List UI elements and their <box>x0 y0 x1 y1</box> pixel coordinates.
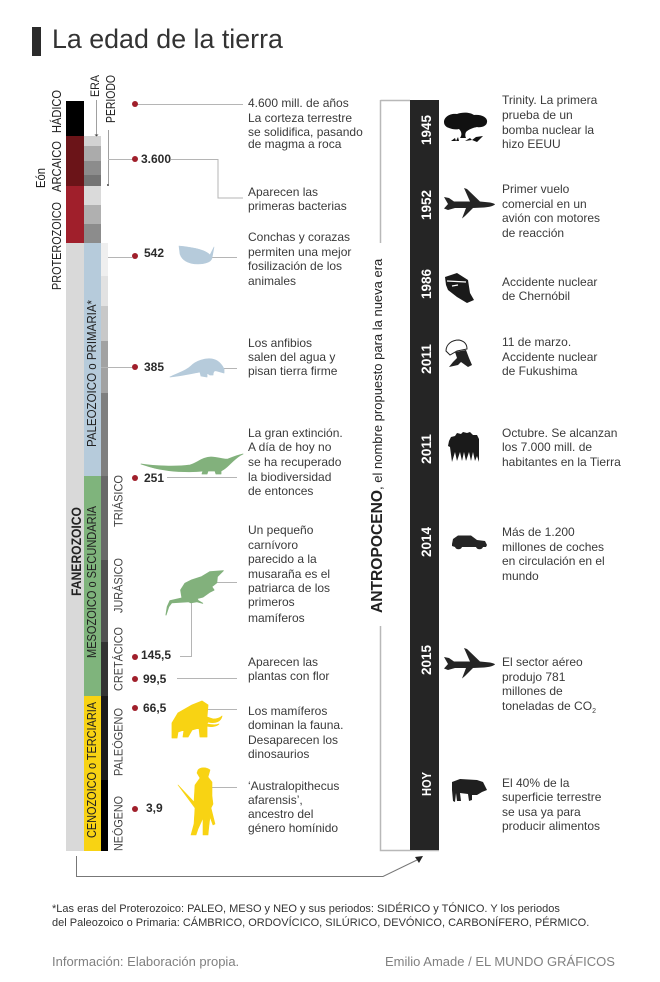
text blocks: geological events: afarensis’, <box>248 793 303 807</box>
source credit: Información: Elaboración propia. <box>52 954 239 969</box>
text blocks: geological events: Los mamíferos <box>248 704 327 718</box>
age markers: 3.600 <box>141 152 171 166</box>
age markers: 3,9 <box>146 801 163 815</box>
text blocks: geological events: pisan tierra firme <box>248 364 338 378</box>
timeline bar: Anthropocene years: 2014 <box>418 527 434 557</box>
period names: JURÁSICO <box>110 558 126 613</box>
timeline bar: Anthropocene years: HOY <box>419 772 434 796</box>
timeline bar: Anthropocene years: 2011 <box>418 344 434 374</box>
text blocks: human events: Trinity. La primera <box>502 93 598 107</box>
text blocks: geological events: patriarca de los <box>248 581 330 595</box>
timeline bar: Anthropocene years: 1952 <box>418 190 434 220</box>
text blocks: human events: Accidente nuclear <box>502 350 597 364</box>
text blocks: human events: Primer vuelo <box>502 182 570 196</box>
text blocks: human events <box>502 93 621 833</box>
timeline bar: Anthropocene years: 1986 <box>418 269 434 299</box>
age markers: 542 <box>144 246 164 260</box>
text blocks: human events: El sector aéreo <box>502 655 583 669</box>
period names: CRETÁCICO <box>110 627 126 691</box>
text blocks: geological events: 4.600 mill. de años <box>248 96 349 110</box>
text blocks: human events: 2 <box>592 708 596 715</box>
era and period pointers <box>94 100 109 186</box>
timeline bar: Anthropocene years: 2015 <box>418 645 434 675</box>
text blocks: geological events: Aparecen las <box>248 655 318 669</box>
text blocks: human events: se usa ya para <box>502 805 581 819</box>
vertical labels: eons and eras: HÁDICO <box>49 90 64 133</box>
column: periods <box>101 243 108 851</box>
icon: airplane 1952 <box>444 188 495 218</box>
text blocks: human events: hizo EEUU <box>502 137 561 151</box>
text blocks: geological events: se ha recuperado <box>248 455 342 469</box>
icon: gas mask head <box>445 273 474 303</box>
text blocks: geological events: La corteza terrestre <box>248 111 352 125</box>
vertical labels: eons and eras: CENOZOICO o TERCIARIA <box>85 701 99 838</box>
text blocks: geological events: dinosaurios <box>248 747 309 761</box>
text blocks: geological events: Desaparecen los <box>248 733 338 747</box>
text blocks: geological events: dominan la fauna. <box>248 718 343 732</box>
text blocks: geological events: la biodiversidad <box>248 470 331 484</box>
icon: sauropod dinosaur <box>141 454 243 474</box>
age markers: 145,5 <box>141 648 171 662</box>
text blocks: human events: avión con motores <box>502 211 600 225</box>
period names: TRIÁSICO <box>110 475 126 527</box>
timeline bar: Anthropocene years: 2011 <box>418 434 434 464</box>
text blocks: human events: prueba de un <box>502 108 573 122</box>
icon: mammoth <box>172 701 222 738</box>
text blocks: geological events: permiten una mejor <box>248 245 351 259</box>
text blocks: human events: Octubre. Se alcanzan <box>502 426 617 440</box>
text blocks: geological events: Aparecen las <box>248 185 318 199</box>
icon: shell fossil <box>179 246 214 264</box>
timeline bar: Anthropocene years <box>410 100 439 850</box>
vertical labels: eons and eras <box>34 75 118 838</box>
text blocks: geological events: ‘Australopithecus <box>248 779 339 793</box>
text blocks: human events: Más de 1.200 <box>502 525 575 539</box>
text blocks: geological events: salen del agua y <box>248 350 335 364</box>
author credit: Emilio Amade / EL MUNDO GRÁFICOS <box>385 954 615 969</box>
icon: car <box>452 536 487 549</box>
text blocks: geological events: género homínido <box>248 821 338 835</box>
timeline bar: Anthropocene years: 1945 <box>418 115 434 145</box>
vertical labels: eons and eras: ERA <box>88 75 102 97</box>
text blocks: human events: produjo 781 <box>502 670 566 684</box>
vertical labels: eons and eras: PALEOZOICO o PRIMARIA* <box>85 300 99 447</box>
footnote: del Paleozoico o Primaria: CÁMBRICO, ORDOVÍCICO, SILÚRICO, DEVÓNICO, CARBONÍFERO, PÉRMICO. <box>52 916 589 929</box>
icon: cow <box>452 779 487 802</box>
text blocks: geological events: carnívoro <box>248 538 298 552</box>
text blocks: human events: El 40% de la <box>502 776 570 790</box>
text blocks: human events: en circulación en el <box>502 554 605 568</box>
bracket: Antropoceno: ANTROPOCENO, el nombre propuesto para la nueva era <box>369 258 386 613</box>
text blocks: geological events: mamíferos <box>248 611 305 625</box>
icon: airplane 2015 <box>444 648 495 678</box>
text blocks: geological events: primeros <box>248 595 295 609</box>
period names <box>110 475 126 851</box>
text blocks: human events: millones de coches <box>502 540 604 554</box>
text blocks: human events: superficie terrestre <box>502 790 602 804</box>
vertical labels: eons and eras: Eón <box>34 168 48 188</box>
age markers: 251 <box>144 471 164 485</box>
vertical labels: eons and eras: FANEROZOICO <box>69 507 84 596</box>
icon: atomic bomb cloud <box>444 113 487 142</box>
text blocks: geological events: Conchas y corazas <box>248 230 350 244</box>
text blocks: human events: habitantes en la Tierra <box>502 455 621 469</box>
icon: amphibian <box>170 359 224 377</box>
column: eras <box>84 136 101 851</box>
text blocks: geological events: se solidifica, pasando <box>248 125 363 139</box>
text blocks: human events: producir alimentos <box>502 819 600 833</box>
age markers <box>132 101 171 815</box>
footnote <box>52 902 589 929</box>
text blocks: geological events: La gran extinción. <box>248 426 343 440</box>
text blocks: human events: 11 de marzo. <box>502 335 571 349</box>
title: La edad de la tierra <box>52 24 283 54</box>
arrow: from Fanerozoico to Antropoceno <box>76 856 423 876</box>
text blocks: human events: toneladas de CO <box>502 699 592 713</box>
text blocks: human events: comercial en un <box>502 197 587 211</box>
text blocks: geological events: animales <box>248 274 296 288</box>
period names: NEÓGENO <box>110 796 126 851</box>
text blocks: human events: bomba nuclear la <box>502 123 594 137</box>
vertical labels: eons and eras: PROTEROZOICO <box>50 202 64 290</box>
text blocks: geological events: ancestro del <box>248 807 313 821</box>
text blocks: geological events: musaraña es el <box>248 567 330 581</box>
text blocks: human events: mundo <box>502 569 539 583</box>
vertical labels: eons and eras: PERIODO <box>104 75 118 123</box>
icon: small mammal <box>166 571 223 615</box>
text blocks: geological events: de magma a roca <box>248 137 342 151</box>
text blocks: human events: de Fukushima <box>502 364 578 378</box>
chart: geological timeline columns <box>66 101 108 851</box>
text blocks: human events: millones de <box>502 684 563 698</box>
age markers: 66,5 <box>143 701 167 715</box>
text blocks: geological events: parecido a la <box>248 552 317 566</box>
text blocks: geological events: plantas con flor <box>248 669 329 683</box>
vertical labels: eons and eras: MESOZOICO o SECUNDARIA <box>85 505 99 658</box>
text blocks: human events: de reacción <box>502 226 564 240</box>
text blocks: human events: de Chernóbil <box>502 289 570 303</box>
age markers: 385 <box>144 360 164 374</box>
text blocks: geological events <box>248 96 363 835</box>
vertical labels: eons and eras: ARCAICO <box>50 141 64 192</box>
text blocks: human events: los 7.000 mill. de <box>502 440 592 454</box>
text blocks: geological events: fosilización de los <box>248 259 342 273</box>
text blocks: human events: Accidente nuclear <box>502 275 597 289</box>
bracket: Antropoceno <box>369 100 439 850</box>
connector lines <box>101 104 243 788</box>
period names: PALEÓGENO <box>110 708 126 776</box>
text blocks: geological events: de entonces <box>248 484 313 498</box>
age markers: 99,5 <box>143 672 167 686</box>
text blocks: geological events: Un pequeño <box>248 523 314 537</box>
icon: crowd <box>448 432 479 462</box>
icon: helmet worker <box>446 340 472 367</box>
text blocks: geological events: A día de hoy no <box>248 440 332 454</box>
text blocks: geological events: Los anfibios <box>248 336 312 350</box>
text blocks: geological events: primeras bacterias <box>248 199 347 213</box>
column: eons <box>66 101 84 851</box>
icon: hominid <box>178 768 215 835</box>
footnote: *Las eras del Proterozoico: PALEO, MESO y NEO y sus periodos: SIDÉRICO y TÓNICO. Y los periodos <box>52 902 560 915</box>
